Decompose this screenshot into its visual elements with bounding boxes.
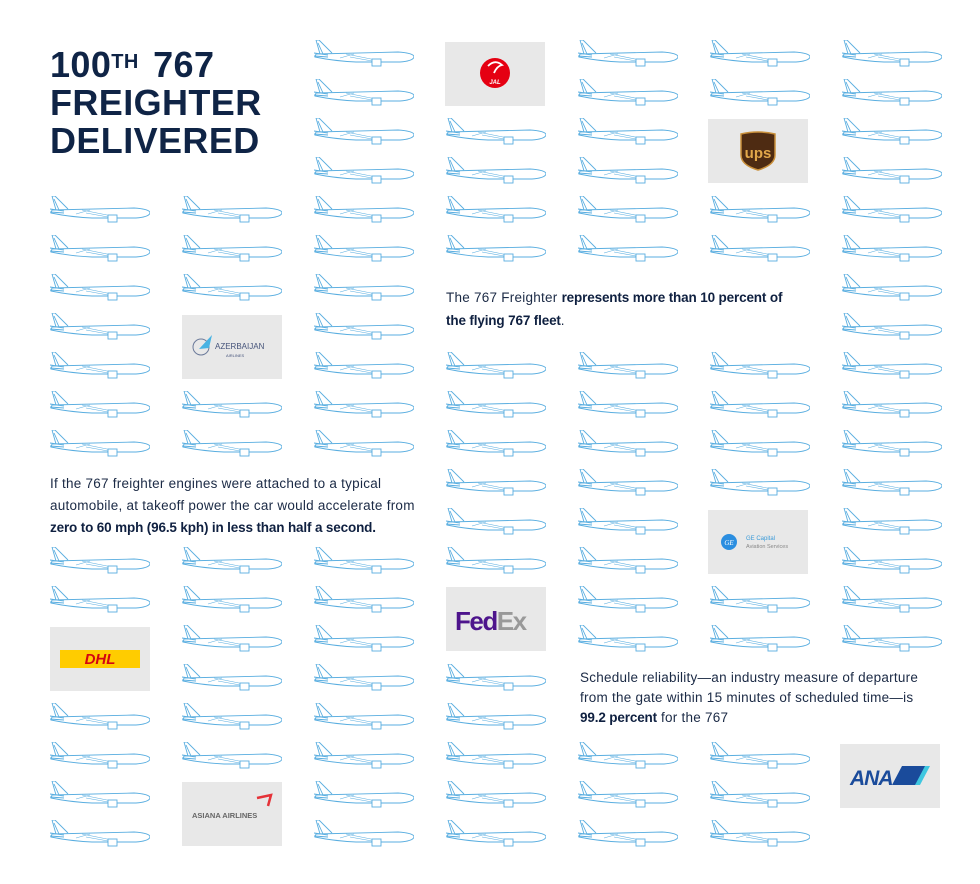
title: DELIVERED [50, 120, 260, 161]
logo: FedEx: FedEx [455, 606, 528, 636]
plane column 6 [710, 40, 810, 846]
logo: ANA [840, 744, 940, 808]
logo: DHL [50, 627, 150, 691]
logo: Azerbaijan Airlines: AZERBAIJAN [215, 342, 265, 351]
text: schedule reliability fact [580, 670, 918, 725]
text: schedule reliability fact: Schedule reliability—an industry measure of departure [580, 670, 918, 685]
title: 100TH 767 [50, 44, 214, 85]
text: fleet percent fact: The 767 Freighter represents more than 10 percent of [446, 290, 782, 305]
logo: UPS: ups [745, 145, 771, 162]
logo: ANA: ANA [849, 767, 892, 790]
text: engine acceleration fact: If the 767 freighter engines were attached to a typical [50, 476, 381, 491]
logo: Azerbaijan Airlines [182, 315, 282, 379]
text: schedule reliability fact: 99.2 percent for the 767 [580, 710, 728, 725]
logo: Azerbaijan Airlines: AIRLINES [226, 353, 245, 358]
text: engine acceleration fact [50, 476, 415, 535]
logo: GE Capital: GE Capital [746, 536, 775, 542]
logo: JAL: JAL [489, 80, 501, 86]
logo: GE Capital: GE [724, 539, 734, 547]
logo: Asiana Airlines: ASIANA AIRLINES [192, 811, 257, 820]
text: fleet percent fact [446, 290, 783, 328]
text: engine acceleration fact: zero to 60 mph (96.5 kph) in less than half a second. [50, 520, 376, 535]
plane column 7 [842, 40, 942, 651]
title [50, 44, 262, 161]
logo: FedEx [446, 587, 546, 651]
text: fleet percent fact: the flying 767 fleet. [446, 313, 565, 328]
title: FREIGHTER [50, 82, 262, 123]
logo: GE Capital: Aviation Services [746, 544, 788, 550]
text: engine acceleration fact: automobile, at takeoff power the car would accelerate from [50, 498, 415, 513]
text: schedule reliability fact: from the gate within 15 minutes of scheduled time—is [580, 690, 913, 705]
plane column 4 [446, 118, 546, 846]
plane column 1 [50, 196, 150, 846]
logo: UPS [708, 119, 808, 183]
logo: Asiana Airlines [182, 782, 282, 846]
plane column 5 [578, 40, 678, 846]
logo: DHL: DHL [85, 651, 115, 668]
logo: GE Capital [708, 510, 808, 574]
plane column 3 [314, 40, 414, 846]
plane column 2 [182, 196, 282, 768]
logo: JAL [445, 42, 545, 106]
